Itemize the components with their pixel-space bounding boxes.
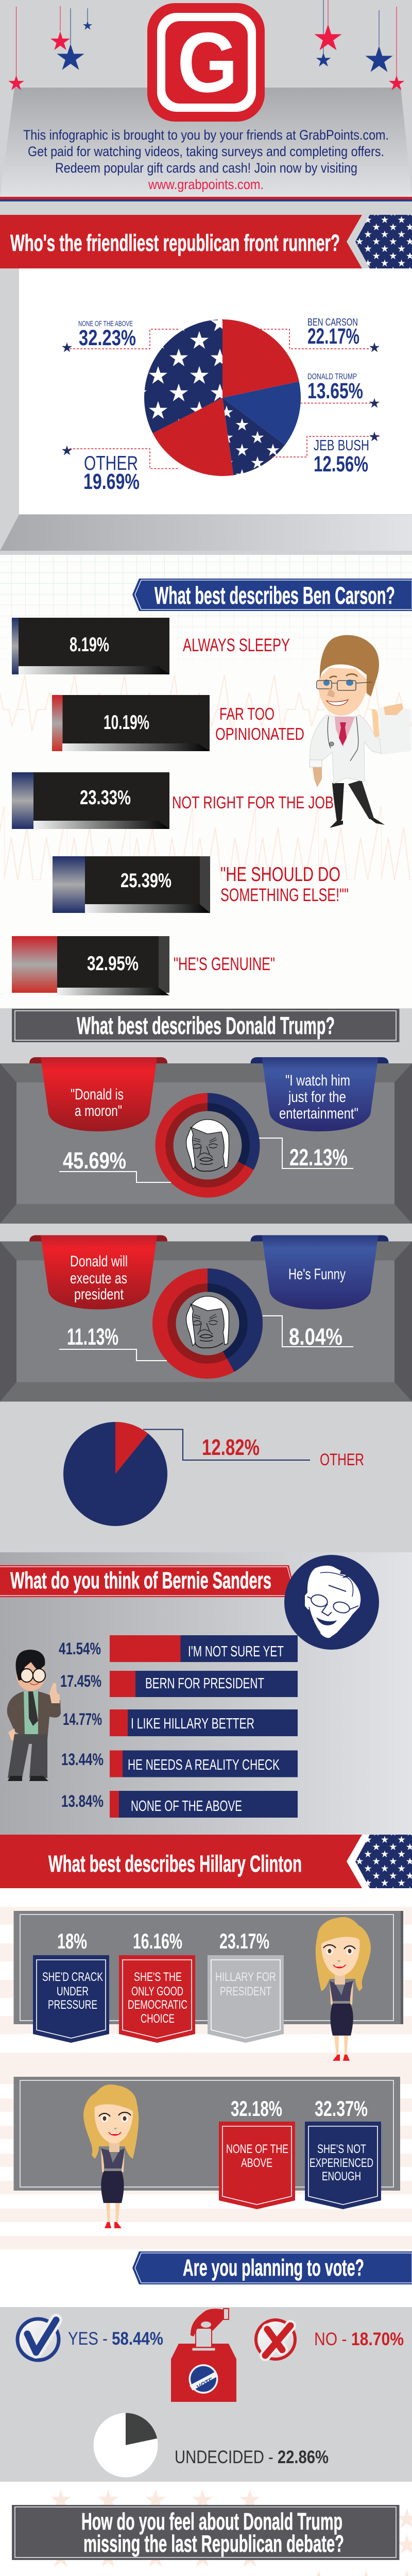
bar: he's genuine: [12, 936, 275, 995]
pennant: Hillary for president: HILLARY FOR: [215, 1970, 276, 1984]
ribbon: Donald is a moron: [29, 1057, 167, 1131]
illustration: ballot box: VOTE: [196, 2376, 215, 2391]
panel: Trump execute vs funny: [0, 1235, 412, 1401]
icon: no cross: [256, 2320, 295, 2359]
label: ben carson: 22.17%: [307, 324, 359, 349]
label: jeb bush: 12.56%: [314, 452, 368, 477]
illustration: Hillary facing right: [83, 2084, 139, 2228]
callout: 45.69: [59, 1147, 171, 1182]
box: last two answers: [13, 2077, 400, 2228]
label: none of the above: NONE OF THE ABOVE: [78, 319, 133, 328]
bar: far too opinionated: [52, 695, 304, 751]
panel: Hillary Clinton: [0, 1835, 412, 2307]
pennant: she'd crack: UNDER: [57, 1985, 89, 1998]
label: jeb bush: [314, 437, 369, 477]
bar: he should do something else: SOMETHING ELSE!"": [220, 885, 349, 905]
heading: planning to vote: [132, 2251, 412, 2284]
pennant: not experienced enough: 32.37%: [315, 2096, 368, 2121]
heading: Donald Trump: [12, 1009, 400, 1042]
pennant: only good democratic choice: [119, 1929, 195, 2043]
pennant: not experienced enough: ENOUGH: [322, 2170, 361, 2183]
callout: 22.13: 22.13%: [289, 1144, 348, 1171]
pennant: Hillary for president: PRESIDENT: [220, 1985, 271, 1998]
panel: Trump moron vs entertainment: [0, 1057, 412, 1224]
illustration: man with thumb up: [7, 1650, 61, 1781]
ribbon: Donald is a moron: "Donald is: [71, 1086, 124, 1103]
GrabPoints logo: G: [177, 15, 238, 110]
bar: not sure yet: [59, 1635, 298, 1662]
ribbon: just for the entertainment: entertainment": [279, 1105, 358, 1122]
bar: always sleepy: [12, 618, 290, 674]
gray intro trapezoid: [0, 88, 412, 197]
donut chart with Trump face: [152, 1268, 263, 1379]
hanging stars right: [314, 0, 404, 90]
bar: bern for president: BERN FOR PRESIDENT: [145, 1675, 264, 1692]
pennant: only good democratic choice: 16.16%: [133, 1929, 182, 1953]
label: none of the above: [78, 319, 136, 350]
bar: not right for the job: NOT RIGHT FOR THE JOB: [172, 793, 334, 812]
hanging stars left: [8, 6, 92, 90]
panel: Ben Carson: [0, 555, 412, 1008]
bottom shelf of pie panel: [0, 515, 412, 551]
pennant: Hillary for president: 23.17%: [219, 1929, 269, 1953]
bar: I like Hillary better: 14.77%: [63, 1710, 102, 1728]
GrabPoints logo: [147, 3, 265, 122]
pennant: she'd crack: [33, 1929, 109, 2043]
heading: Bernie Sanders: [0, 1565, 296, 1597]
label: ben carson: BEN CARSON: [307, 317, 358, 328]
pie chart: other 12.82: OTHER: [320, 1450, 364, 1469]
ribbon: Donald will execute: Donald will: [70, 1253, 128, 1270]
bar: he's genuine: 32.95%: [87, 953, 139, 975]
callout: 8.04: [263, 1316, 353, 1350]
dashed leaders: [70, 329, 380, 469]
label: donald trump: DONALD TRUMP: [307, 372, 357, 381]
bar: not right for the job: [12, 772, 334, 829]
bar: far too opinionated: 10.19%: [104, 711, 149, 734]
panel: friendliest pie chart: [19, 268, 412, 514]
bar: I like Hillary better: I LIKE HILLARY BETTER: [131, 1716, 254, 1732]
label: other: 19.69%: [83, 469, 140, 494]
callout: 8.04: 8.04%: [289, 1324, 342, 1350]
pennant: she'd crack: PRESSURE: [48, 1998, 97, 2012]
donut chart with Trump face: [156, 1093, 260, 1197]
icon: yes check mark: [18, 2319, 59, 2360]
pennant: Hillary for president: [208, 1929, 284, 2043]
leader stars: [62, 342, 380, 455]
pennant: none of the above: NONE OF THE: [226, 2142, 288, 2156]
bar: not sure yet: 41.54%: [59, 1639, 101, 1658]
pennant: none of the above: ABOVE: [241, 2156, 272, 2170]
bar: reality check: [61, 1750, 298, 1777]
pennant: only good democratic choice: CHOICE: [141, 2012, 175, 2026]
bar: far too opinionated: FAR TOO: [219, 704, 274, 723]
label: other: [83, 452, 140, 494]
pennant: not experienced enough: EXPERIENCED: [310, 2156, 373, 2170]
pennant: none of the above: [219, 2096, 295, 2209]
panel: Trump missing debate: [0, 2482, 412, 2576]
bar: reality check: 13.44%: [61, 1750, 104, 1769]
red and blue divider stripe: [0, 197, 412, 201]
bar: he should do something else: 25.39%: [121, 870, 171, 892]
ribbon: just for the entertainment: [250, 1057, 388, 1131]
bar: none of the above: 13.84%: [61, 1792, 104, 1810]
pennant: not experienced enough: [305, 2096, 381, 2209]
pie chart: other 12.82: [63, 1422, 364, 1526]
pennant: she'd crack: 18%: [57, 1929, 87, 1953]
ribbon: Donald is a moron: a moron": [75, 1103, 122, 1120]
callout: 11.13: 11.13%: [67, 1324, 118, 1350]
ribbon: just for the entertainment: just for the: [288, 1089, 346, 1106]
callout: 22.13: [259, 1138, 353, 1171]
bar: I like Hillary better: [63, 1709, 298, 1736]
illustration: Hillary facing left: [316, 1917, 371, 2061]
intro text: www.grabpoints.com.: [148, 177, 264, 192]
pennant: not experienced enough: SHE'S NOT: [317, 2142, 366, 2156]
pennant: none of the above: 32.18%: [231, 2096, 282, 2121]
pie chart: [144, 319, 301, 476]
label: donald trump: [307, 372, 363, 403]
ribbon: just for the entertainment: "I watch him: [285, 1072, 350, 1089]
bar: he's genuine: "HE'S GENUINE": [174, 954, 275, 974]
pennant: only good democratic choice: SHE'S THE: [134, 1970, 182, 1984]
callout: 45.69: 45.69%: [63, 1147, 126, 1174]
bar: not right for the job: 23.33%: [80, 787, 131, 809]
heading: debate: [12, 2505, 400, 2560]
ribbon: Donald will execute: execute as: [70, 1270, 127, 1287]
heading: friendliest republican: [0, 215, 412, 268]
label: ben carson: [307, 317, 359, 349]
bar: he should do something else: "HE SHOULD DO: [220, 863, 340, 886]
bar: none of the above: [61, 1791, 298, 1818]
illustration: ballot box: [171, 2309, 236, 2402]
bar: bern for president: 17.45%: [60, 1672, 101, 1690]
panel: Bernie Sanders: [0, 1552, 412, 1835]
label: donald trump: 13.65%: [307, 379, 363, 403]
ribbon: Donald will execute: [29, 1235, 167, 1310]
text: yes: YES - 58.44%: [68, 2329, 163, 2349]
bar: none of the above: NONE OF THE ABOVE: [131, 1798, 242, 1815]
pie chart: other 12.82: 12.82%: [202, 1435, 260, 1460]
bar: reality check: HE NEEDS A REALITY CHECK: [128, 1757, 280, 1773]
bar: always sleepy: 8.19%: [70, 634, 109, 656]
callout: 11.13: [59, 1324, 167, 1361]
bar: bern for president: [60, 1671, 298, 1697]
pie: undecided: [94, 2413, 158, 2477]
heading: Bernie Sanders: What do you think of Bernie Sanders: [10, 1567, 271, 1594]
bar: far too opinionated: OPINIONATED: [215, 724, 304, 743]
label: none of the above: 32.23%: [79, 326, 136, 350]
pennant: she'd crack: SHE'D CRACK: [42, 1970, 103, 1984]
pennant: only good democratic choice: DEMOCRATIC: [128, 1998, 187, 2012]
label: jeb bush: JEB BUSH: [314, 437, 369, 454]
bar: not sure yet: I'M NOT SURE YET: [188, 1643, 284, 1660]
text: no: NO - 18.70%: [314, 2329, 404, 2349]
pennant: only good democratic choice: ONLY GOOD: [131, 1985, 183, 1998]
ribbon: Donald will execute: president: [74, 1286, 124, 1303]
ribbon: He's funny: He's Funny: [288, 1266, 346, 1283]
intro text: [23, 127, 389, 192]
panel: planning to vote: [0, 2307, 412, 2482]
ribbon: He's funny: [250, 1235, 388, 1310]
bar: always sleepy: ALWAYS SLEEPY: [183, 635, 290, 655]
icon: Bernie portrait: [284, 1555, 379, 1650]
text: undecided: UNDECIDED - 22.86%: [175, 2447, 329, 2467]
label: other: OTHER: [84, 452, 138, 474]
intro text: Redeem popular gift cards and cash! Join now by visiting: [55, 160, 357, 176]
header panel: [0, 0, 412, 201]
bar: he should do something else: [53, 856, 349, 913]
illustration: doctor: [310, 635, 411, 828]
box: first three answers: [13, 1911, 403, 2061]
heading: Hillary Clinton: [0, 1835, 412, 1888]
